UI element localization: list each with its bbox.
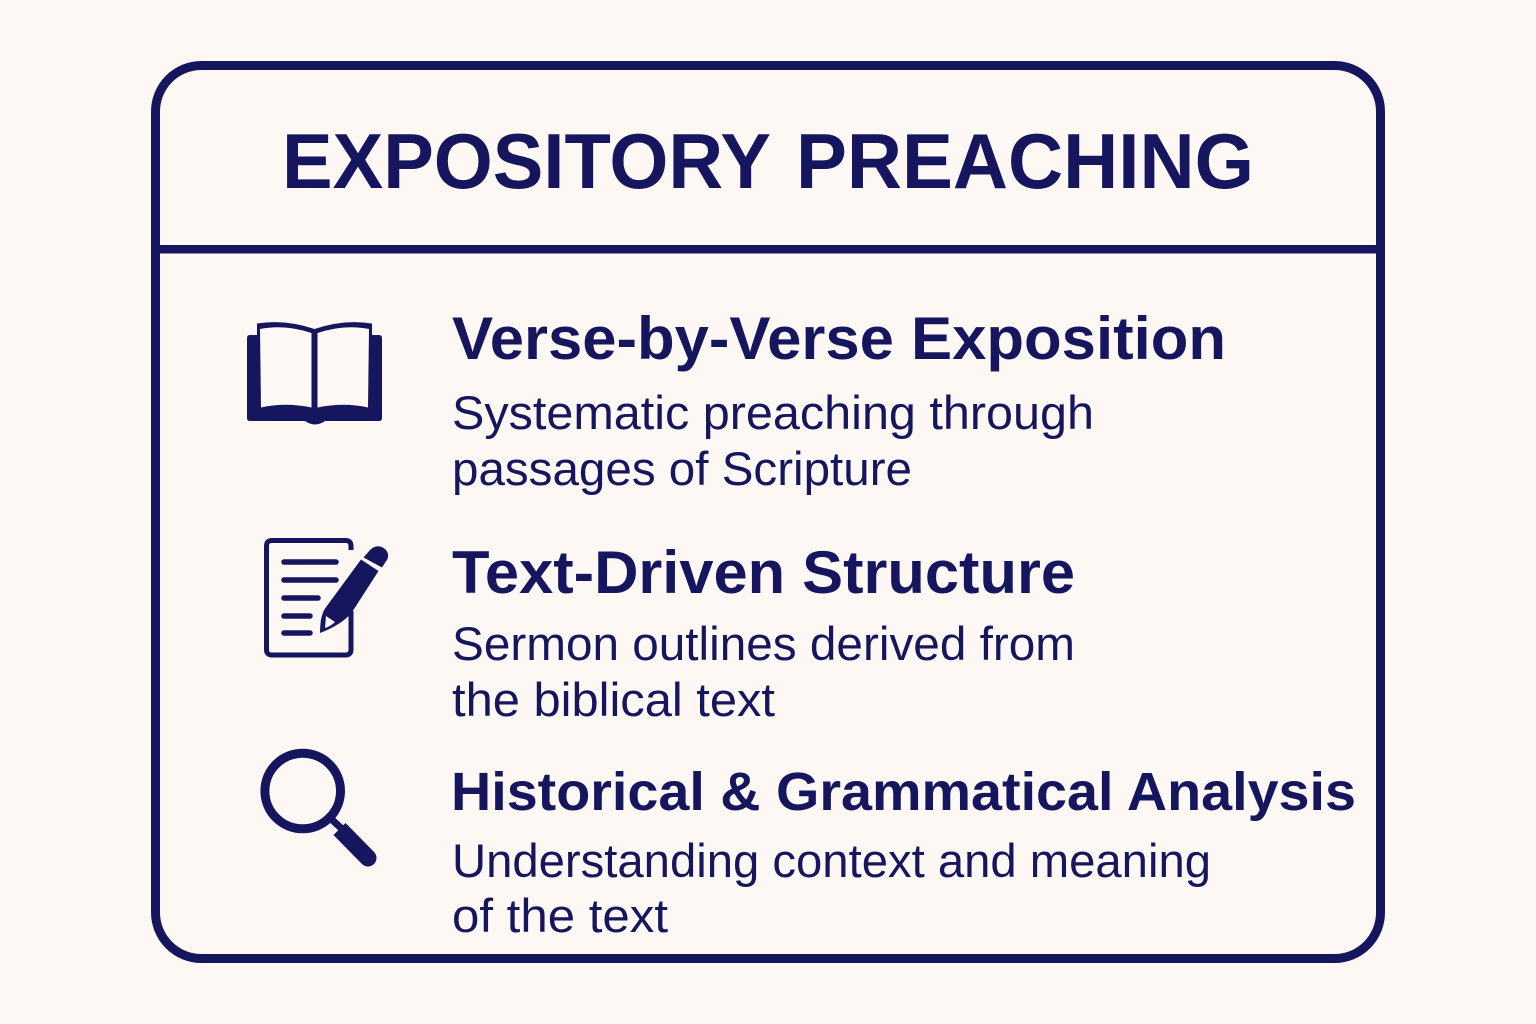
item 3: description: Understanding context and meaning	[452, 834, 1211, 887]
item 2: description: Sermon outlines derived from	[452, 617, 1075, 670]
item 2: description: the biblical text	[452, 673, 775, 726]
item 2: heading: Text-Driven Structure	[452, 539, 1075, 606]
title	[282, 117, 1254, 205]
panel: main frame	[155, 66, 1381, 958]
item 3: description: of the text	[452, 889, 668, 942]
item 2: description	[452, 617, 1075, 726]
icon: open book	[247, 322, 382, 424]
item 1: description: passages of Scripture	[452, 442, 912, 495]
icon: document and pencil	[266, 540, 388, 655]
item 3: heading: Historical & Grammatical Analysis	[451, 762, 1356, 822]
title: EXPOSITORY	[282, 117, 771, 205]
item 3: description	[452, 834, 1211, 942]
item 1: description	[452, 386, 1094, 495]
item 1: description: Systematic preaching through	[452, 386, 1094, 439]
icon: magnifying glass	[265, 753, 376, 866]
title: PREACHING	[796, 117, 1254, 205]
item 1: heading: Verse-by-Verse Exposition	[452, 305, 1226, 372]
